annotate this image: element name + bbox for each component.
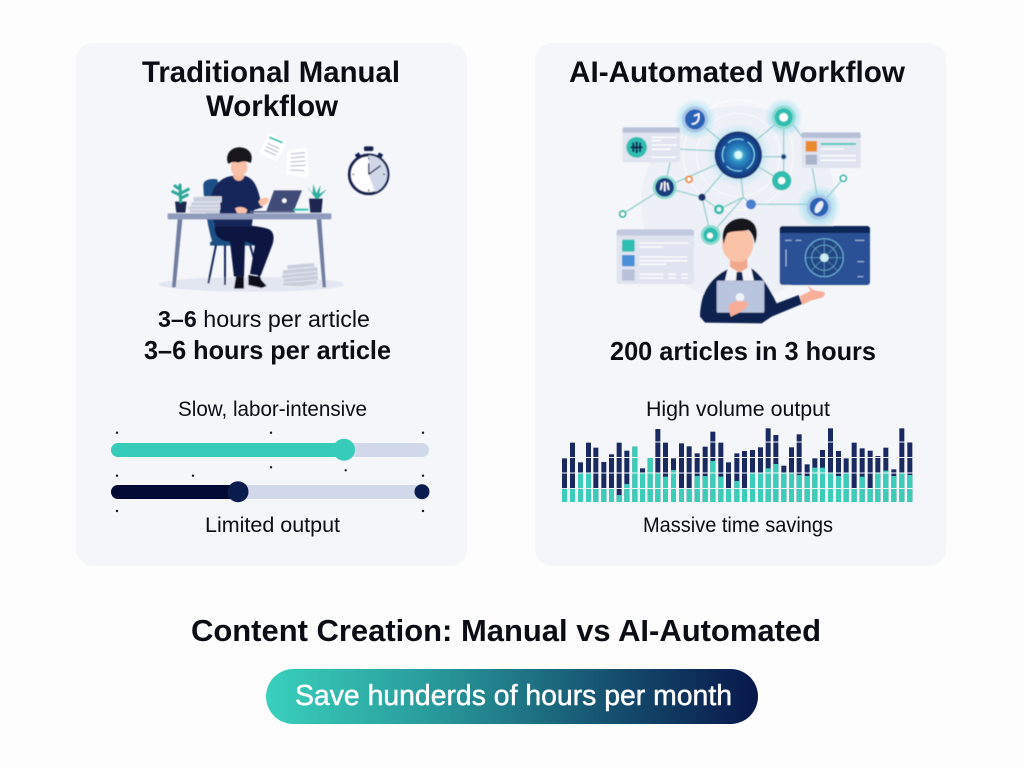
illustration: person working at desk [159,133,388,292]
business person with laptop [700,218,825,323]
central ai orb [707,123,770,187]
label: massive time savings: Massive time savings [643,514,833,537]
network connector lines [623,117,843,235]
desk [168,213,331,287]
plant left [173,185,188,213]
flying paper 1 [259,133,287,162]
label: high volume output: High volume output [646,398,830,421]
ui card: top right [802,132,861,168]
slider: teal progress [111,439,429,461]
paper stack on desk [188,197,221,213]
label: limited output: Limited output [205,514,340,537]
ui card: top left [623,127,680,162]
stat: 3-6 hours per article (small): 3–6 hours per article [158,306,370,332]
person [210,147,274,289]
heading: traditional manual workflow [142,56,400,123]
slider: navy progress [111,481,430,502]
illustration: ai network and professional [617,98,870,323]
callout pill: save hunderds of hours [266,669,758,724]
tick dots [116,432,424,512]
plant right [307,184,327,213]
bar chart: output volume [560,428,915,502]
callout pill: save hunderds of hours: Save hunderds of hours per month [295,680,732,712]
stat: 3-6 hours per article (large): 3–6 hours per article [144,335,391,365]
network nodes [620,98,846,245]
stopwatch [349,146,388,194]
ui card: bottom left [617,229,694,284]
heading: traditional manual workflow: Traditional Manual [142,56,400,89]
panel: traditional manual workflow [76,43,467,566]
heading: ai-automated workflow: AI-Automated Workflow [569,56,906,89]
paper stack on floor [282,263,318,287]
label: slow, labor-intensive: Slow, labor-intensive [178,398,367,421]
flying paper 2 [286,148,309,177]
dashboard screen with radar [780,226,870,285]
chair [203,179,261,285]
main title: Content Creation: Manual vs AI-Automated [191,613,821,648]
laptop [250,190,308,213]
heading: traditional manual workflow: Workflow [206,90,339,123]
stat: 200 articles in 3 hours: 200 articles in 3 hours [610,336,876,366]
panel: ai-automated workflow [535,43,946,566]
